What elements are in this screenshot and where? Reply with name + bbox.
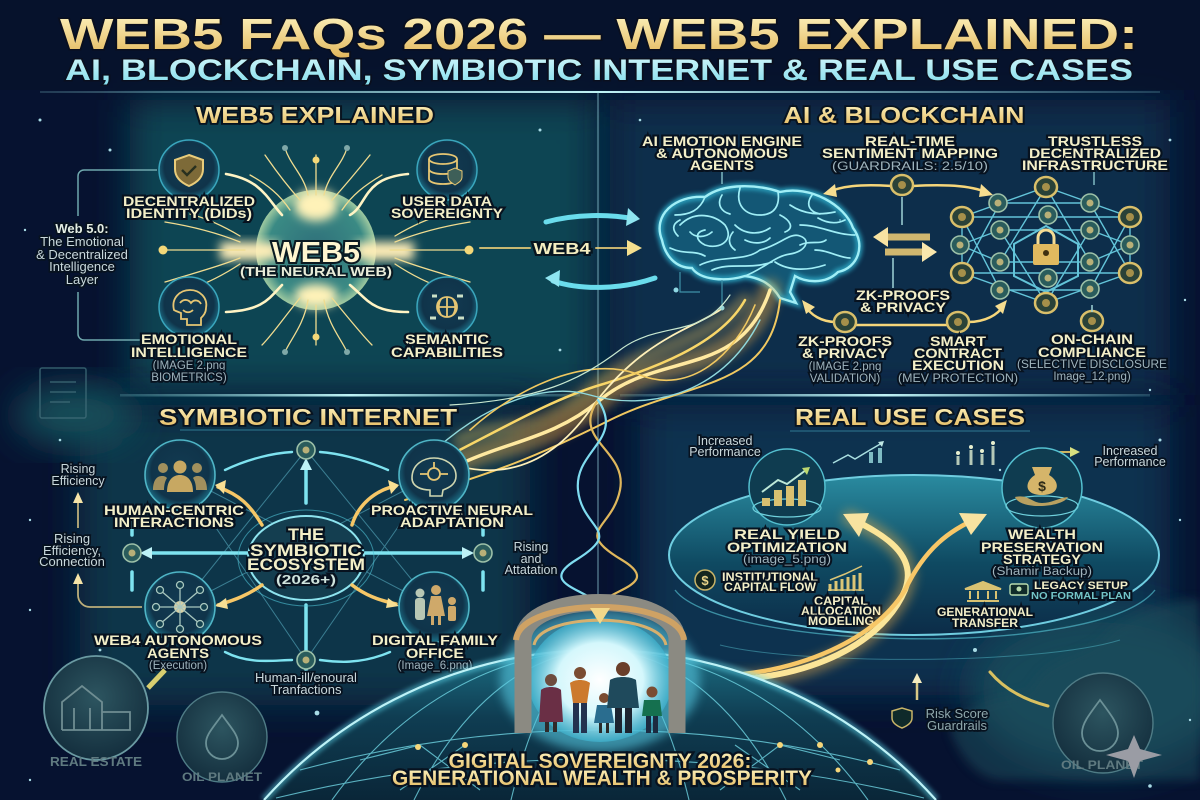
- label: on-chain compliance: ON-CHAIN: [1051, 331, 1133, 347]
- icon: institutional capital flow: [695, 570, 818, 594]
- icon: legacy setup: LEGACY SETUP: [1034, 580, 1128, 592]
- panel: digital sovereignty: [264, 602, 936, 800]
- banner: digital sovereignty text: GIGITAL SOVEREIGNTY 2026:: [448, 750, 752, 773]
- label: sentiment mapping: [822, 133, 998, 173]
- icon: generational transfer: TRANSFER: [952, 618, 1019, 630]
- node: decentralized identity: IDENTITY (DIDs): [126, 205, 252, 221]
- label: ai emotion engine: & AUTONOMOUS: [656, 145, 788, 161]
- arrows: bottom loop: [802, 300, 1103, 332]
- neural hub: (THE NEURAL WEB): [240, 264, 392, 279]
- note: rising efficiency connection: [39, 492, 142, 607]
- label: trustless infrastructure: TRUSTLESS: [1048, 133, 1142, 149]
- note: increased performance right: Increased: [1103, 444, 1157, 458]
- label: on-chain compliance: (SELECTIVE DISCLOSURE: [1017, 359, 1167, 371]
- globe ellipse: [669, 475, 1159, 659]
- node: digital family office: (Image_6.png): [398, 660, 473, 672]
- node: digital family office: OFFICE: [406, 645, 464, 661]
- node: wealth preservation: STRATEGY: [1003, 551, 1082, 567]
- heading: symbiotic internet: SYMBIOTIC INTERNET: [159, 404, 457, 430]
- note: risk score guardrails: [892, 673, 988, 733]
- note: rising efficiency connection: Rising: [54, 531, 90, 546]
- icon: legacy setup: NO FORMAL PLAN: [1031, 591, 1131, 602]
- label: zk proofs centre: ZK-PROOFS: [856, 287, 950, 303]
- note: rising efficiency: Rising: [61, 462, 95, 476]
- side note: web 5.0: Web 5.0:: [55, 221, 109, 236]
- gold spokes: [218, 486, 396, 605]
- label: sentiment mapping: SENTIMENT MAPPING: [822, 145, 998, 161]
- banner: digital sovereignty text: [392, 750, 812, 790]
- hub: symbiotic ecosystem: THE: [288, 525, 324, 544]
- node: wealth preservation: (Shamir Backup): [992, 566, 1092, 578]
- label: smart contract: [898, 333, 1018, 385]
- label: trustless infrastructure: DECENTRALIZED: [1029, 145, 1161, 161]
- note: increased performance left: Performance: [689, 445, 761, 459]
- icon: institutional capital flow: INSTITUTIONAL: [722, 570, 818, 584]
- hub: symbiotic ecosystem: (2026+): [276, 572, 336, 587]
- label: smart contract: SMART: [930, 333, 986, 349]
- title: AI, BLOCKCHAIN, SYMBIOTIC INTERNET & REAL USE CASES: [65, 54, 1133, 87]
- node: wealth preservation: WEALTH: [1008, 526, 1076, 542]
- brain: [660, 172, 859, 310]
- label: smart contract: (MEV PROTECTION): [898, 373, 1018, 385]
- label: zk proofs validation: & PRIVACY: [802, 345, 889, 361]
- label: trustless infrastructure: [1022, 133, 1168, 173]
- label: on-chain compliance: Image_12.png): [1053, 371, 1131, 383]
- node: real yield optimization: [727, 449, 847, 566]
- connector: web4 arrows: WEB4: [534, 241, 591, 258]
- label: zk proofs validation: [798, 333, 892, 385]
- icon: generational transfer: GENERATIONAL: [937, 607, 1033, 619]
- note: rising efficiency connection: Connection: [39, 554, 105, 569]
- note: human transactions: Tranfactions: [270, 682, 342, 697]
- blockchain network: [951, 172, 1141, 313]
- icon: capital allocation modeling: CAPITAL: [814, 596, 868, 608]
- label: zk proofs validation: ZK-PROOFS: [798, 333, 892, 349]
- label: ai emotion engine: AI EMOTION ENGINE: [642, 133, 802, 149]
- arrows: between brain and network: [823, 175, 993, 288]
- panel: web5 explained: [36, 102, 504, 384]
- node: web4 autonomous agents: [94, 572, 262, 672]
- note: increased performance left: [689, 434, 761, 459]
- label: smart contract: EXECUTION: [912, 357, 1004, 373]
- note: increased performance right: [1030, 444, 1166, 469]
- note: risk score guardrails: Guardrails: [927, 718, 987, 733]
- icon: legacy setup: [1010, 580, 1131, 602]
- node: user data sovereignty: USER DATA: [402, 193, 492, 209]
- sphere: oil planet left: OIL PLANET: [182, 770, 263, 784]
- side note: web 5.0: & Decentralized: [36, 247, 128, 262]
- node: web4 autonomous agents: AGENTS: [147, 645, 209, 661]
- note: rising and attatation: and: [521, 552, 541, 566]
- label: ai emotion engine: AGENTS: [690, 157, 754, 173]
- label: zk proofs centre: & PRIVACY: [860, 299, 947, 315]
- label: zk proofs validation: VALIDATION): [810, 373, 880, 385]
- icon: capital allocation modeling: ALLOCATION: [801, 606, 881, 618]
- family: [539, 662, 662, 733]
- node: decentralized identity: DECENTRALIZED: [123, 193, 255, 209]
- node: emotional intelligence: (IMAGE 2.png: [153, 360, 225, 372]
- node: real yield optimization: (image_5.png): [743, 554, 831, 566]
- icon: sparkle watermark: [1106, 735, 1162, 778]
- note: rising and attatation: [505, 540, 557, 577]
- node: emotional intelligence: INTELLIGENCE: [131, 344, 247, 360]
- sphere: oil planet left: [177, 692, 267, 784]
- node: semantic capabilities: [391, 277, 503, 360]
- node: wealth preservation: [981, 448, 1103, 578]
- node: human-centric interactions: INTERACTIONS: [114, 514, 234, 530]
- icon: capital allocation modeling: [801, 566, 881, 628]
- note: rising and attatation: Attatation: [505, 563, 557, 577]
- node: real yield optimization: REAL YIELD: [734, 526, 840, 542]
- label: sentiment mapping: REAL-TIME: [865, 133, 955, 149]
- neural hub: [158, 145, 474, 355]
- node: semantic capabilities: CAPABILITIES: [391, 344, 503, 360]
- sphere: oil planet right: OIL PLANET: [1061, 758, 1144, 772]
- icon: institutional capital flow: CAPITAL FLOW: [724, 580, 817, 594]
- heading: web5 explained: WEB5 EXPLAINED: [196, 102, 434, 128]
- banner: digital sovereignty text: GENERATIONAL WEALTH & PROSPERITY: [392, 767, 812, 790]
- node: proactive neural adaptation: [371, 440, 533, 530]
- note: human transactions: [255, 670, 357, 697]
- icon: document: [40, 368, 86, 418]
- label: smart contract: CONTRACT: [914, 345, 1002, 361]
- label: trustless infrastructure: INFRASTRUCTURE: [1022, 157, 1168, 173]
- node: proactive neural adaptation: ADAPTATION: [400, 514, 504, 530]
- sphere: real estate: [44, 656, 165, 769]
- note: risk score guardrails: Risk Score: [926, 706, 988, 721]
- node: wealth preservation: PRESERVATION: [981, 539, 1103, 555]
- panel: symbiotic internet: [39, 404, 557, 697]
- energy waves: [405, 290, 780, 620]
- node: human-centric interactions: [104, 440, 244, 530]
- side note: web 5.0: Intelligence: [49, 259, 115, 274]
- heading: real use cases: REAL USE CASES: [795, 404, 1025, 430]
- sphere: real estate: REAL ESTATE: [50, 755, 142, 769]
- label: ai emotion engine: [642, 133, 802, 173]
- label: on-chain compliance: COMPLIANCE: [1038, 344, 1146, 360]
- node: digital family office: [372, 572, 499, 672]
- node: web4 autonomous agents: WEB4 AUTONOMOUS: [94, 632, 262, 648]
- panel: ai and blockchain: [642, 102, 1168, 385]
- note: human transactions: Human-ill/enoural: [255, 670, 357, 685]
- gold split arrow: [690, 513, 987, 680]
- note: rising efficiency: Efficiency: [51, 474, 105, 488]
- panel: real use cases: [669, 404, 1166, 778]
- node: human-centric interactions: HUMAN-CENTRIC: [104, 502, 244, 518]
- icon: institutional capital flow: $: [701, 573, 709, 588]
- note: rising efficiency connection: Efficiency,: [43, 543, 101, 558]
- node: semantic capabilities: SEMANTIC: [405, 331, 489, 347]
- heading: ai and blockchain: AI & BLOCKCHAIN: [784, 102, 1024, 128]
- portal: [500, 602, 700, 752]
- network lines: [132, 450, 483, 660]
- node: user data sovereignty: [391, 140, 504, 221]
- note: rising and attatation: Rising: [514, 540, 548, 554]
- icon: capital allocation modeling: MODELING: [808, 616, 874, 628]
- hub: symbiotic ecosystem: SYMBIOTIC: [250, 541, 362, 560]
- label: sentiment mapping: (GUARDRAILS: 2.5/10): [832, 161, 988, 173]
- title: [60, 10, 1138, 87]
- node: emotional intelligence: EMOTIONAL: [141, 331, 238, 347]
- node: web4 autonomous agents: (Execution): [149, 660, 207, 672]
- node: decentralized identity: [123, 140, 255, 221]
- node: emotional intelligence: BIOMETRICS): [151, 372, 227, 384]
- globe: [264, 650, 936, 800]
- side note: web 5.0: The Emotional: [40, 234, 124, 249]
- node: emotional intelligence: [131, 277, 247, 384]
- sphere: oil planet right: [990, 672, 1162, 778]
- node: proactive neural adaptation: PROACTIVE NEURAL: [371, 502, 533, 518]
- node: real yield optimization: OPTIMIZATION: [727, 539, 847, 555]
- label: on-chain compliance: [1017, 331, 1167, 383]
- label: zk proofs centre: [856, 287, 950, 315]
- icon: generational transfer: [937, 582, 1033, 630]
- node: wealth preservation: $: [1038, 478, 1046, 494]
- node: digital family office: DIGITAL FAMILY: [372, 632, 499, 648]
- node: user data sovereignty: SOVEREIGNTY: [391, 205, 504, 221]
- title: WEB5 FAQs 2026 — WEB5 EXPLAINED:: [60, 10, 1138, 59]
- note: increased performance right: Performance: [1094, 455, 1166, 469]
- side note: web 5.0: [36, 170, 157, 340]
- connector: web4 arrows: [480, 208, 655, 287]
- label: zk proofs validation: (IMAGE 2.png: [809, 361, 881, 373]
- note: rising efficiency: [51, 462, 105, 488]
- hub: symbiotic ecosystem: [238, 510, 374, 606]
- neural hub: WEB5: [272, 237, 360, 269]
- chart glyph: [833, 441, 995, 465]
- hub: symbiotic ecosystem: ECOSYSTEM: [247, 555, 365, 574]
- side note: web 5.0: Layer: [66, 272, 99, 287]
- note: increased performance left: Increased: [698, 434, 752, 448]
